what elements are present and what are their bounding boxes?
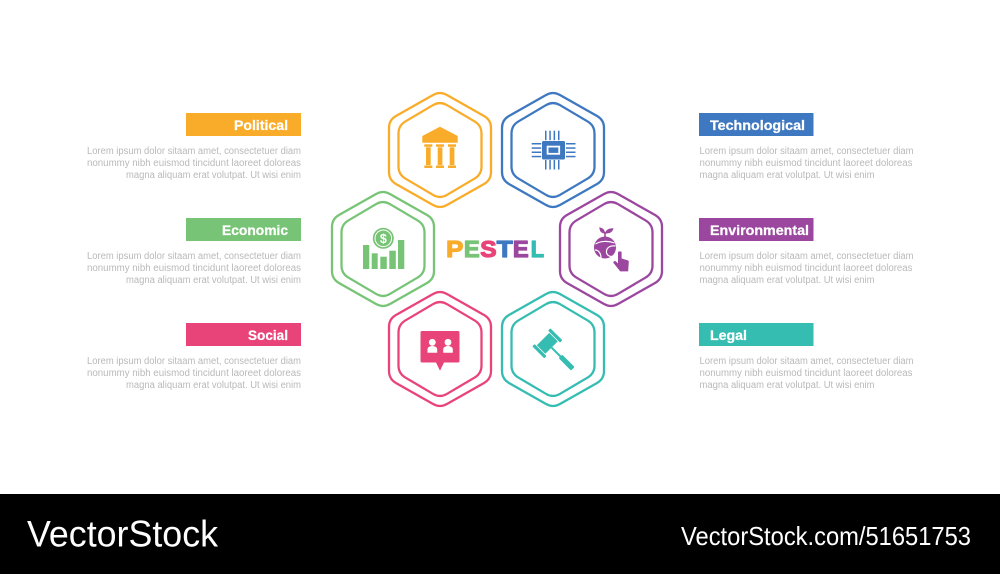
label: Political: Political xyxy=(234,118,288,133)
label: Environmental: Environmental xyxy=(710,223,809,238)
text block: Legal description: magna aliquam erat volutpat. Ut wisi enim xyxy=(700,380,874,391)
panel: Environmental text xyxy=(699,218,914,286)
text block: Economic description: Lorem ipsum dolor sitaam amet, consectetuer diam xyxy=(87,251,301,262)
text block: Political description: magna aliquam erat volutpat. Ut wisi enim xyxy=(126,170,301,181)
hexagon: Technological xyxy=(502,93,604,207)
label: Social xyxy=(186,323,301,346)
label: Legal: Legal xyxy=(710,328,747,343)
footer: watermark bar xyxy=(0,494,1000,574)
hexagon: Social xyxy=(389,292,491,406)
icon: gavel xyxy=(532,328,582,378)
text block: Social description: magna aliquam erat volutpat. Ut wisi enim xyxy=(126,380,301,391)
title: PESTEL: E xyxy=(513,236,529,262)
title: PESTEL: P xyxy=(446,236,463,262)
label: Economic xyxy=(186,218,301,241)
text block: Technological description: Lorem ipsum dolor sitaam amet, consectetuer diam xyxy=(700,146,914,157)
text block: Technological description xyxy=(700,146,914,181)
footer image id: VectorStock.com/51651753 xyxy=(681,521,971,551)
text block: Social description xyxy=(87,356,301,391)
icon: speech bubble with two people xyxy=(420,331,460,371)
text block: Environmental description: magna aliquam erat volutpat. Ut wisi enim xyxy=(700,275,874,286)
label: Environmental xyxy=(699,218,814,241)
text block: Economic description xyxy=(87,251,301,286)
label: Social: Social xyxy=(248,328,288,343)
title: PESTEL: E xyxy=(464,236,480,262)
title: PESTEL: T xyxy=(497,236,513,262)
text block: Technological description: nonummy nibh euismod tincidunt laoreet doloreas xyxy=(700,158,912,169)
text block: Technological description: magna aliquam erat volutpat. Ut wisi enim xyxy=(700,170,874,181)
title: PESTEL xyxy=(446,236,544,262)
label: Legal xyxy=(699,323,814,346)
text block: Economic description: magna aliquam erat volutpat. Ut wisi enim xyxy=(126,275,301,286)
panel: Legal text xyxy=(699,323,914,391)
text block: Environmental description xyxy=(700,251,914,286)
text block: Economic description: nonummy nibh euismod tincidunt laoreet doloreas xyxy=(87,263,301,274)
label: Technological: Technological xyxy=(710,118,805,133)
hexagon: Political xyxy=(389,93,491,207)
title: PESTEL: S xyxy=(480,236,497,262)
panel: Economic text xyxy=(87,218,301,286)
icon: bank building xyxy=(422,127,458,168)
text block: Legal description xyxy=(700,356,914,391)
icon: coin over bar chart: $ xyxy=(380,232,387,246)
hexagon: Economic xyxy=(332,192,434,306)
panel: Social text xyxy=(87,323,301,391)
text block: Legal description: nonummy nibh euismod tincidunt laoreet doloreas xyxy=(700,368,912,379)
panel: Technological text xyxy=(699,113,914,181)
text block: Political description: Lorem ipsum dolor sitaam amet, consectetuer diam xyxy=(87,146,301,157)
text block: Political description xyxy=(87,146,301,181)
text block: Political description: nonummy nibh euismod tincidunt laoreet doloreas xyxy=(87,158,301,169)
hexagon: Legal xyxy=(502,292,604,406)
title: PESTEL: L xyxy=(531,236,544,262)
footer logo text: VectorStock xyxy=(27,514,218,554)
label: Political xyxy=(186,113,301,136)
text block: Legal description: Lorem ipsum dolor sitaam amet, consectetuer diam xyxy=(700,356,914,367)
icon: globe with sprout and pointing hand xyxy=(594,227,629,272)
label: Economic: Economic xyxy=(222,223,289,238)
icon: microchip xyxy=(532,131,576,170)
text block: Social description: Lorem ipsum dolor sitaam amet, consectetuer diam xyxy=(87,356,301,367)
hexagon: Environmental xyxy=(560,192,662,306)
text block: Social description: nonummy nibh euismod tincidunt laoreet doloreas xyxy=(87,368,301,379)
label: Technological xyxy=(699,113,814,136)
panel: Political text xyxy=(87,113,301,181)
text block: Environmental description: Lorem ipsum dolor sitaam amet, consectetuer diam xyxy=(700,251,914,262)
text block: Environmental description: nonummy nibh euismod tincidunt laoreet doloreas xyxy=(700,263,912,274)
